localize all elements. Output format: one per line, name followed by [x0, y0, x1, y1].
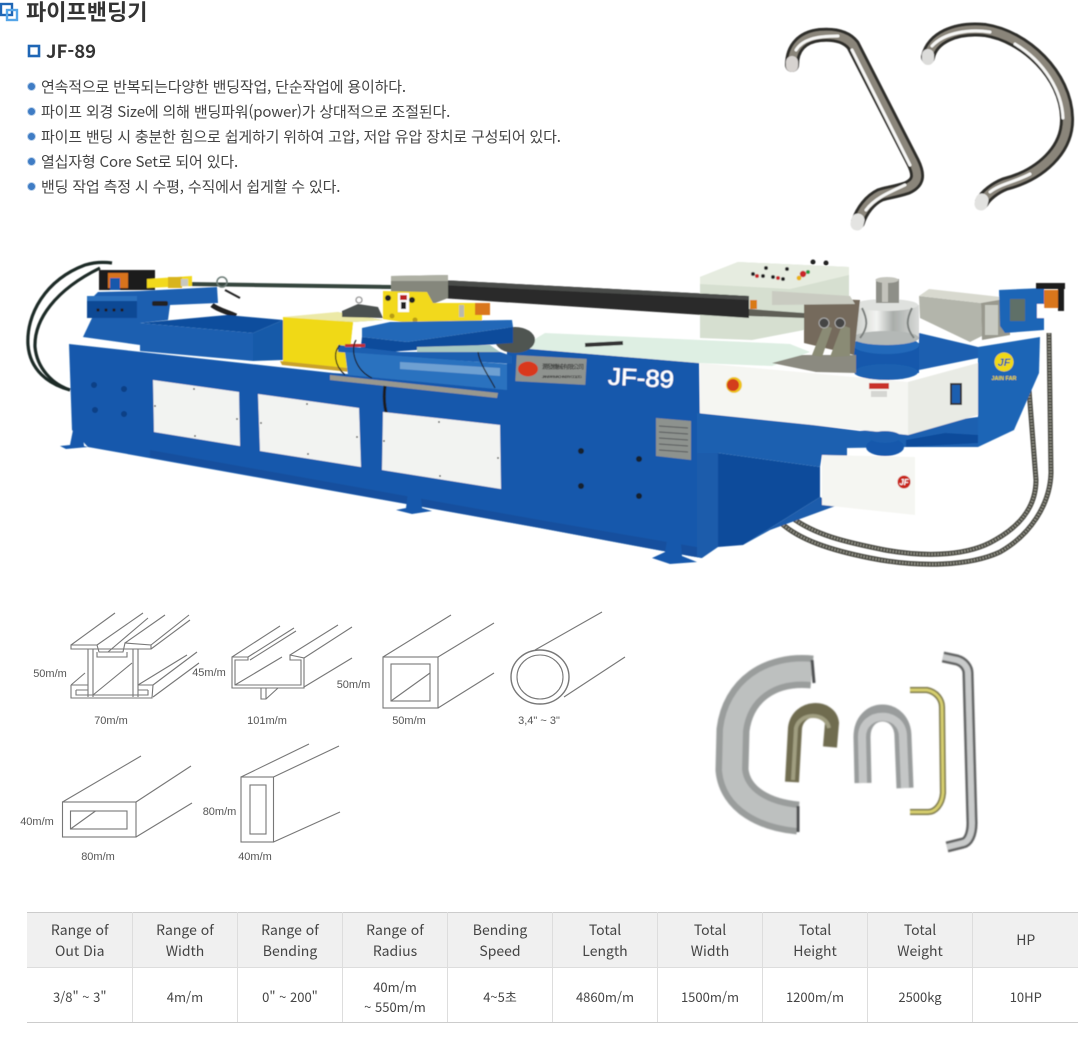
specification table: Total — [589, 920, 621, 940]
photo: chrome bent pipes — [792, 30, 1067, 224]
diagram: wide rectangular tube — [62, 756, 192, 837]
specification table: Total — [799, 920, 831, 940]
right braided hoses — [781, 333, 1051, 564]
photo: JF-89 pipe bending machine — [28, 260, 1065, 564]
JF logo: JAIN FAR — [991, 376, 1017, 382]
open blue hopper — [140, 315, 283, 333]
right cylinder — [999, 288, 1044, 333]
diagram: C-channel extrusion — [232, 625, 352, 699]
photo: JF-89 pipe bending machine: 潤發機械有限公司 — [542, 363, 584, 371]
specification table: Out Dia — [55, 940, 104, 960]
photo: JF-89 pipe bending machine: JF — [899, 478, 910, 487]
diagram dimension labels — [20, 667, 560, 863]
blue slide table — [362, 320, 513, 342]
diagram dimension labels: 101m/m — [247, 715, 287, 727]
bed lower shade — [150, 450, 702, 558]
control box — [700, 262, 849, 340]
specification table: 4860m/m — [576, 987, 634, 1006]
specification table: 0" ~ 200" — [262, 987, 318, 1006]
mounting feet — [60, 428, 697, 564]
thin feed rod — [120, 281, 391, 289]
right arm — [978, 337, 1040, 447]
left yellow coupler — [147, 276, 192, 288]
specification table: Bending — [473, 920, 527, 940]
specification table: 40m/m — [373, 977, 417, 996]
bed bolt holes — [91, 382, 127, 417]
specification table: Range of — [261, 920, 319, 940]
JF logo — [991, 352, 1017, 382]
lower rotary hub — [906, 433, 978, 447]
diagram dimension labels: 40m/m — [20, 816, 54, 828]
specification table: Width — [691, 940, 729, 960]
feature list: 열십자형 Core Set로 되어 있다. — [41, 151, 238, 172]
diagram: tall rectangular tube — [241, 744, 340, 842]
model name on machine: JF-89 — [607, 363, 675, 394]
feature list: 파이프 외경 Size에 의해 밴딩파워(power)가 상대적으로 조절된다. — [41, 101, 450, 122]
left blue head — [83, 287, 218, 345]
specification table: 10HP — [1010, 987, 1042, 1006]
nameplate — [515, 355, 587, 385]
specification table: Speed — [479, 940, 521, 960]
photo: bent tube samples — [732, 657, 972, 847]
diagram dimension labels: 50m/m — [33, 668, 67, 680]
side clamp boxes — [919, 296, 982, 342]
specification table: Range of — [51, 920, 109, 940]
bending die — [854, 343, 919, 373]
white counterweight box — [822, 455, 915, 515]
specification table: 1500m/m — [681, 987, 739, 1006]
white front panel — [700, 363, 978, 435]
white access panels — [153, 380, 240, 446]
model heading: JF-89 — [46, 38, 96, 64]
top plate — [520, 333, 810, 366]
specification table: ~ 550m/m — [364, 997, 426, 1016]
black steel pipe — [440, 280, 749, 318]
specification table: Height — [793, 940, 837, 960]
specification table: Range of — [156, 920, 214, 940]
yellow guard box — [330, 312, 383, 368]
feature list: 파이프 밴딩 시 충분한 힘으로 쉽게하기 위하여 고압, 저압 유압 장치로 구성되어 있다. — [41, 126, 561, 147]
upper band under white panel — [697, 413, 978, 467]
specification table: HP — [1016, 930, 1035, 950]
diagram dimension labels: 50m/m — [392, 715, 426, 727]
JF logo: JF — [998, 357, 1011, 369]
specification table: 4m/m — [167, 987, 203, 1006]
diagram dimension labels: 80m/m — [203, 806, 236, 818]
dark under section — [718, 453, 820, 547]
feature list — [27, 76, 561, 197]
specification table: 2500kg — [898, 987, 942, 1006]
specification table: Width — [166, 940, 204, 960]
specification table: Range of — [366, 920, 424, 940]
spec plate — [656, 418, 691, 460]
left cylinder head — [99, 270, 155, 290]
specification table: Bending — [263, 940, 317, 960]
diagram dimension labels: 3,4" ~ 3" — [518, 715, 560, 727]
diagram: H-section extrusion — [71, 613, 199, 698]
grey clamp block — [391, 275, 448, 304]
diagram dimension labels: 40m/m — [238, 851, 272, 863]
specification table: Total — [694, 920, 726, 940]
emergency stop — [726, 377, 742, 393]
specification table: 1200m/m — [786, 987, 844, 1006]
specification table: Length — [582, 940, 628, 960]
icon: model square — [29, 46, 39, 56]
specification table: 4~5초 — [483, 987, 517, 1006]
steel bar — [330, 375, 498, 398]
specification table — [27, 912, 1078, 1023]
diagram: round pipe — [511, 612, 625, 704]
specification table: Total — [904, 920, 936, 940]
specification table: Weight — [897, 940, 943, 960]
photo: JF-89 pipe bending machine: JAIN FAR MACHINERY CO.,LTD. — [542, 374, 582, 379]
left hydraulic hoses — [28, 262, 112, 390]
feature list: 연속적으로 반복되는다양한 밴딩작업, 단순작업에 용이하다. — [41, 76, 406, 97]
specification table: 3/8" ~ 3" — [53, 987, 107, 1006]
yellow carriage — [383, 291, 482, 326]
diagram dimension labels: 70m/m — [94, 715, 128, 727]
diagram: square tube — [383, 615, 494, 708]
diagram dimension labels: 45m/m — [192, 667, 226, 679]
feature list: 밴딩 작업 측정 시 수평, 수직에서 쉽게할 수 있다. — [41, 176, 340, 197]
pressure bracket — [772, 355, 856, 373]
diagram dimension labels: 50m/m — [337, 679, 370, 691]
icon: title squares — [1, 4, 17, 20]
diagram dimension labels: 80m/m — [81, 851, 115, 863]
motor housing — [342, 304, 383, 318]
main blue bed — [69, 344, 702, 558]
specification table: Radius — [373, 940, 417, 960]
